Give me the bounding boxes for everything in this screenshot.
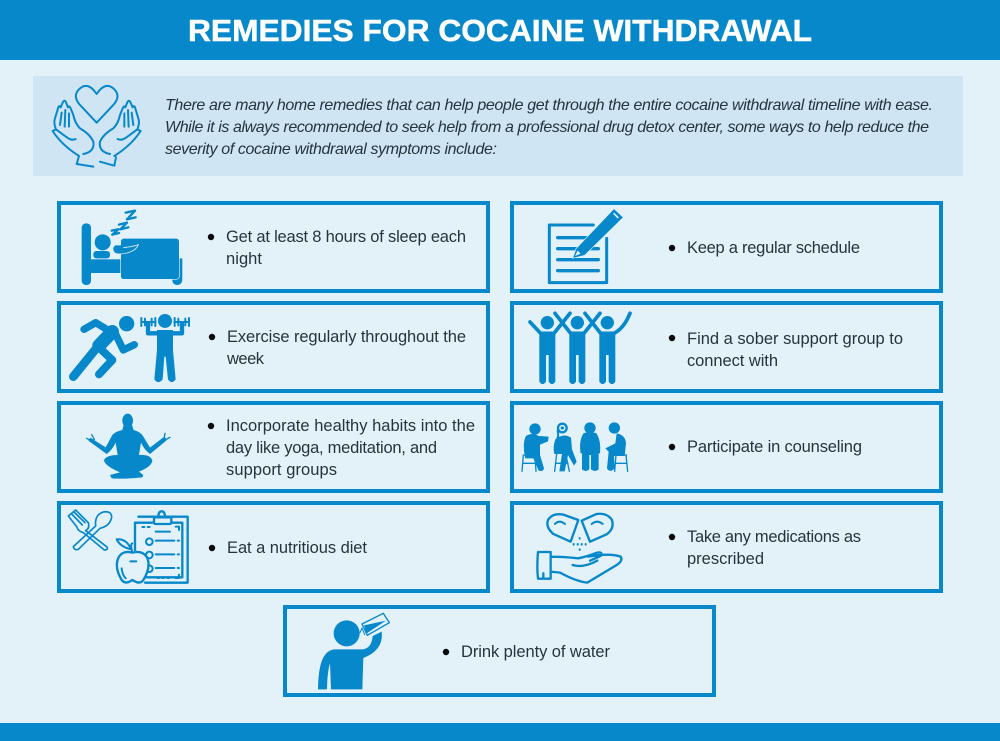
bullet text: night [226, 250, 262, 268]
bullet text: prescribed [687, 550, 764, 568]
panel: support group [512, 303, 941, 391]
bullet text: week [226, 350, 265, 368]
icon: fork, spoon, apple and clipboard [68, 510, 188, 583]
icon: person meditating [87, 414, 170, 479]
panel: schedule [512, 203, 941, 291]
icon: person sleeping in bed [82, 211, 182, 285]
bullet text [208, 417, 475, 479]
bullet text: Exercise regularly throughout the [227, 328, 466, 346]
bullet text: Drink plenty of water [461, 643, 610, 661]
panel: exercise [59, 303, 488, 391]
bullet text: support groups [226, 461, 337, 479]
intro text [165, 97, 933, 158]
bullet text: Keep a regular schedule [687, 239, 860, 257]
panel: water [285, 607, 714, 695]
bullet text: Get at least 8 hours of sleep each [226, 228, 466, 246]
icon: notepad and pencil [549, 209, 623, 283]
bullet text: Participate in counseling [687, 438, 862, 456]
icon: heart in open hands [53, 86, 141, 167]
icon: four seated people [522, 422, 628, 471]
bullet text: Take any medications as [687, 528, 861, 546]
bullet text [669, 330, 903, 370]
icon: three people with raised arms [530, 313, 630, 384]
bullet text [209, 328, 466, 368]
panel: healthy habits [59, 403, 488, 491]
bullet text: Eat a nutritious diet [227, 539, 367, 557]
header banner with title [0, 0, 1000, 60]
bullet text: connect with [687, 352, 778, 370]
intro panel [33, 76, 963, 176]
intro text: There are many home remedies that can help people get through the entire cocaine withdrawal timeline with ease. [165, 97, 933, 114]
panel: diet [59, 503, 488, 591]
panel: counseling [512, 403, 941, 491]
bullet text [208, 228, 466, 268]
footer bar [0, 723, 1000, 741]
icon: capsule over open hand [537, 514, 621, 583]
bullet text: Incorporate healthy habits into the [226, 417, 475, 435]
panel: sleep [59, 203, 488, 291]
bullet text: Find a sober support group to [687, 330, 903, 348]
title: REMEDIES FOR COCAINE WITHDRAWAL [188, 13, 812, 48]
intro text: severity of cocaine withdrawal symptoms include: [165, 141, 497, 158]
bullet text: day like yoga, meditation, and [226, 439, 437, 457]
bullet text [669, 528, 861, 568]
icon: runner and weightlifter [73, 314, 189, 382]
intro text: While it is always recommended to seek help from a professional drug detox center, some ways to help reduce the [165, 119, 929, 136]
panel: medications [512, 503, 941, 591]
icon: person drinking water [318, 613, 389, 689]
